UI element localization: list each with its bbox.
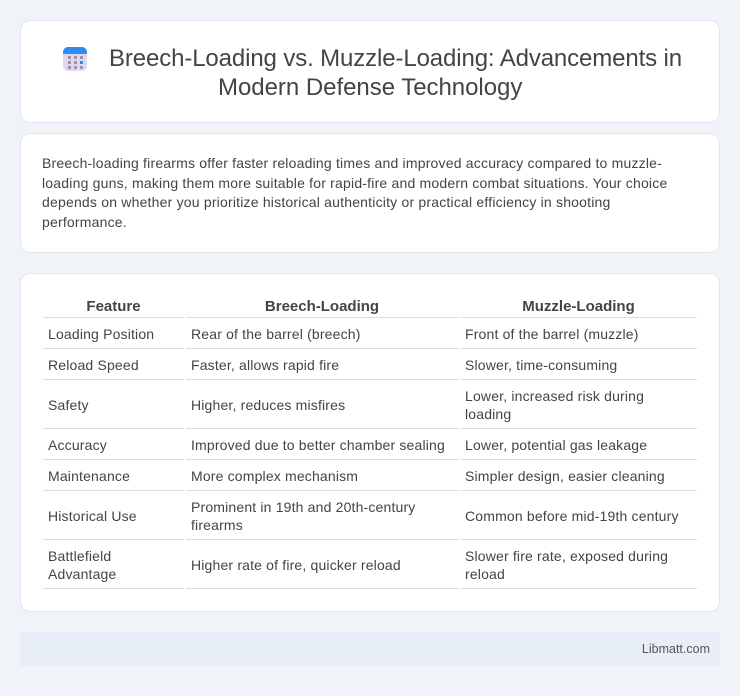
row: Reload Speed: Reload Speed [48,357,139,373]
row: Accuracy: Accuracy [48,437,107,453]
panel: intro text card [20,133,720,253]
comparison table: Rear of the barrel (breech) [191,326,361,342]
comparison table: Slower, time-consuming [465,357,617,373]
comparison table: Common before mid-19th century [465,508,679,524]
intro text: Breech-loading firearms offer faster reloading times and improved accuracy compared to muzzle- [42,155,662,171]
row: Safety: Safety [48,397,89,413]
intro text: performance. [42,214,127,230]
comparison table: reload [465,566,505,582]
comparison table: Higher, reduces misfires [191,397,345,413]
intro text: depends on whether you prioritize historical authenticity or practical efficiency in shooting [42,194,611,210]
intro text: loading guns, making them more suitable for rapid-fire and modern combat situations. Your choice [42,175,667,191]
header: Feature: Feature [86,298,141,315]
panel: comparison table card [20,273,720,612]
panel: title card [20,20,720,123]
title: Breech-Loading vs. Muzzle-Loading: Advancements in [109,45,682,72]
row: Battlefield Advantage: Advantage [48,566,116,582]
intro text [42,155,667,230]
comparison table: Lower, potential gas leakage [465,437,647,453]
comparison table: Higher rate of fire, quicker reload [191,557,401,573]
header: Muzzle-Loading: Muzzle-Loading [522,298,635,315]
header: Breech-Loading: Breech-Loading [265,298,379,315]
comparison table: Front of the barrel (muzzle) [465,326,639,342]
comparison table: Simpler design, easier cleaning [465,468,665,484]
footer text: Libmatt.com [642,642,710,656]
comparison table: Slower fire rate, exposed during [465,548,668,564]
comparison table: Faster, allows rapid fire [191,357,339,373]
comparison table: loading [465,406,511,422]
comparison table: Improved due to better chamber sealing [191,437,445,453]
row: Loading Position: Loading Position [48,326,154,342]
row: Battlefield Advantage [48,548,116,582]
comparison table: More complex mechanism [191,468,358,484]
title [109,45,682,101]
comparison table: Prominent in 19th and 20th-century [191,499,415,515]
title: Modern Defense Technology [218,74,522,101]
comparison table: Lower, increased risk during [465,388,644,404]
comparison table: firearms [191,517,243,533]
footer bar [20,632,720,666]
icon: calendar [63,47,87,71]
row: Maintenance: Maintenance [48,468,130,484]
row: Battlefield Advantage: Battlefield [48,548,111,564]
row: Historical Use: Historical Use [48,508,137,524]
